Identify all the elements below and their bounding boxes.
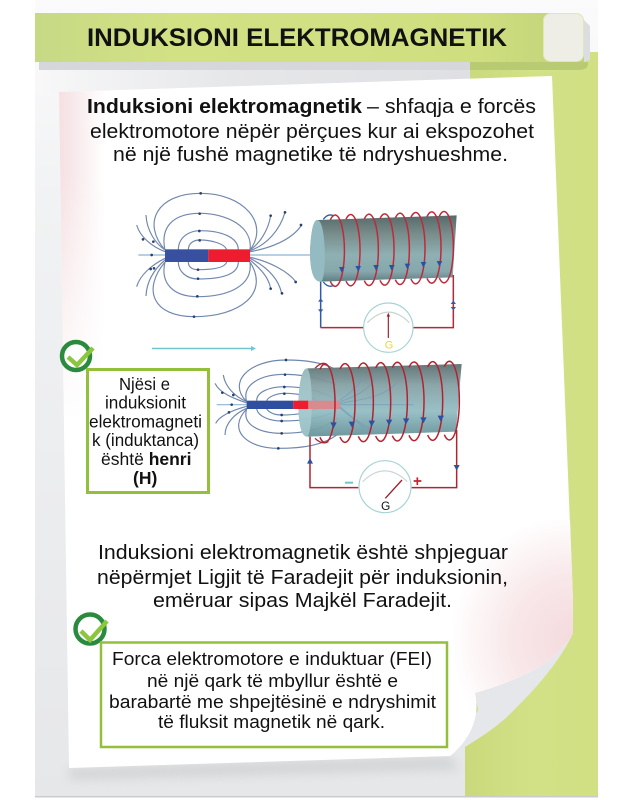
- callout: unit of induction: [88, 370, 208, 492]
- circuit: [321, 275, 453, 328]
- middle text: emëruar sipas Majkël Faradejit.: [153, 589, 452, 612]
- intro text: elektromotore nëpër përçues kur ai ekspozohet: [90, 120, 534, 143]
- paper sheet: [59, 76, 573, 780]
- tab square: [544, 14, 584, 62]
- callout: EMF definition: në një qark të mbyllur është e: [147, 671, 398, 691]
- heading: INDUKSIONI ELEKTROMAGNETIK: [87, 24, 507, 52]
- header bar: [35, 13, 590, 70]
- galvanometer: [345, 461, 421, 513]
- callout: unit of induction: Njësi e: [119, 374, 170, 394]
- cylinder: [298, 364, 462, 437]
- field lines inside coil: [340, 373, 413, 432]
- magnet: [247, 401, 340, 409]
- field lines: [137, 193, 315, 317]
- callout: unit of induction: induksionit: [105, 392, 186, 412]
- callout: unit of induction: k (induktanca): [92, 430, 199, 450]
- coil arrows: [339, 261, 442, 273]
- coil windings: [330, 211, 453, 286]
- coil arrows: [330, 416, 444, 428]
- coil back: [323, 215, 334, 286]
- circuit: [310, 430, 457, 488]
- middle text: Induksioni elektromagnetik është shpjeguar: [98, 541, 508, 564]
- check icon: EMF box: [76, 614, 107, 644]
- intro text: në një fushë magnetike të ndryshueshme.: [113, 143, 508, 166]
- cylinder: [310, 215, 457, 282]
- coil back: [315, 363, 328, 443]
- intro text: – shfaqja e forcës: [367, 95, 536, 118]
- field lines: [215, 360, 337, 448]
- middle text: nëpërmjet Ligjit të Faradejit për induksionin,: [97, 566, 508, 589]
- callout: unit of induction: është henri: [101, 449, 191, 469]
- galvanometer: G: [385, 339, 393, 351]
- callout: EMF definition: Forca elektromotore e induktuar (FEI): [112, 649, 432, 669]
- callout: EMF definition: [101, 642, 447, 747]
- magnet: [165, 249, 250, 262]
- middle text: [97, 541, 508, 612]
- callout: EMF definition: barabartë me shpejtësinë e ndryshimit: [109, 692, 436, 712]
- callout: unit of induction: (H): [133, 468, 157, 488]
- callout: unit of induction: elektromagneti: [89, 412, 202, 432]
- galvanometer: G: [381, 499, 390, 513]
- callout: EMF definition: të fluksit magnetik në qark.: [158, 712, 385, 732]
- diagram: magnet outside coil: [137, 192, 457, 352]
- coil windings: [320, 361, 459, 443]
- galvanometer: [364, 303, 413, 352]
- intro text: [87, 95, 536, 166]
- diagram: magnet entering coil: [215, 359, 462, 513]
- intro text: Induksioni elektromagnetik: [87, 95, 363, 118]
- motion arrow: [152, 346, 256, 351]
- check icon: unit box: [62, 342, 93, 370]
